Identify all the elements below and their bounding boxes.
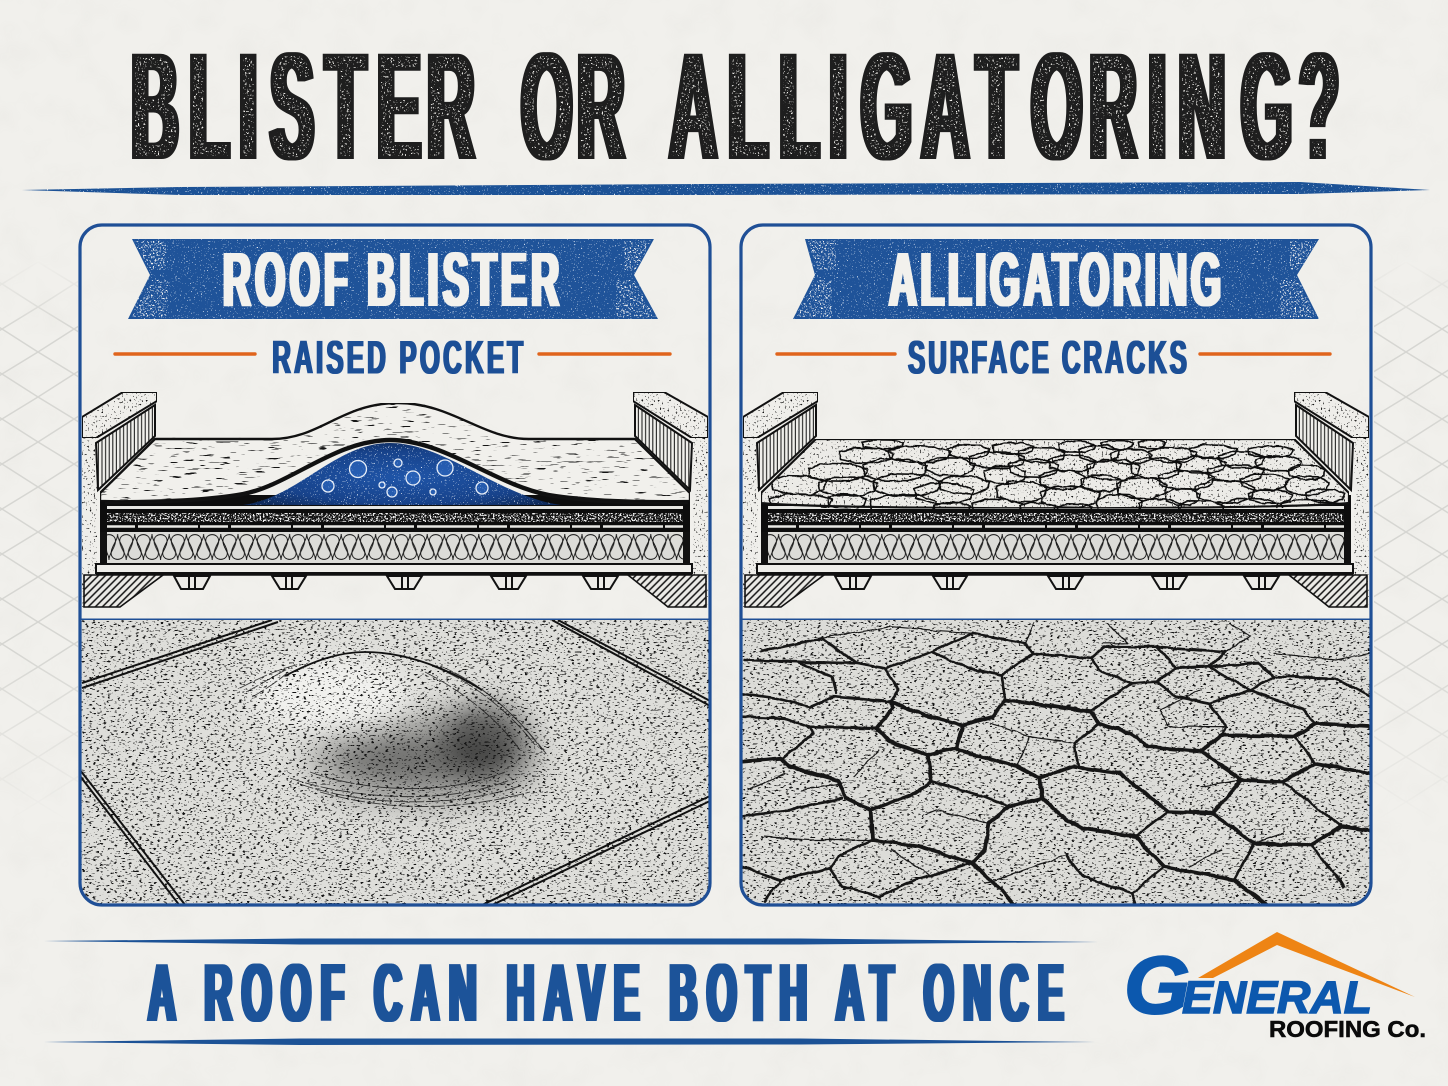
background lattice left and right: [0, 280, 1448, 770]
pocket fill: [243, 443, 561, 505]
contour hatching: [240, 664, 548, 806]
crack cells: [770, 440, 1345, 516]
building frame: [82, 392, 708, 607]
photo: cracked surface close-up: [740, 620, 1371, 906]
title: BLISTER: [131, 20, 475, 191]
panel border: [80, 225, 710, 905]
cross-section diagram: blister: [82, 392, 708, 607]
seams: [80, 620, 712, 906]
ribbon speckle right: [1280, 241, 1316, 317]
ribbon speckle left: [131, 241, 168, 317]
title: ALLIGATORING?: [670, 20, 1339, 191]
orange line right: [539, 352, 670, 356]
medium cracks: [740, 633, 1370, 905]
photo: blister close-up: [80, 620, 712, 906]
bottom tagline: A ROOF CAN HAVE BOTH AT ONCE: [148, 946, 1064, 1039]
surface grain: [741, 620, 1371, 906]
divider between diagram and photo: [741, 618, 1371, 622]
panel: alligatoring: [740, 225, 1371, 906]
title rule: [22, 182, 1430, 195]
orange line right: [1200, 352, 1330, 356]
major cracks: [742, 700, 1370, 905]
ribbon: [128, 239, 658, 319]
ribbon: [793, 239, 1319, 319]
membrane underside line: [105, 441, 688, 503]
bubbles: [322, 459, 488, 497]
banner text: ROOF BLISTER: [223, 236, 559, 322]
surface: [741, 620, 1371, 906]
subtitle text: RAISED POCKET: [272, 333, 523, 385]
ribbon speckle left: [796, 241, 836, 317]
hairline cracks: [748, 623, 1370, 883]
blister shadow: [317, 726, 533, 794]
surface: [80, 620, 710, 906]
cross-section diagram: alligatoring: [743, 392, 1369, 607]
logo: General Roofing Co.: [1124, 932, 1426, 1042]
banner: alligatoring: [793, 236, 1319, 322]
blister dark flank: [443, 702, 527, 774]
logo G: G: [1124, 940, 1190, 1031]
flat cracked roof surface: [761, 439, 1349, 508]
logo ROOFING Co.: ROOFING Co.: [1269, 1016, 1426, 1042]
crack network: [740, 623, 1370, 905]
blister pocket: [243, 443, 561, 505]
blister top edge: [285, 652, 482, 690]
ribbon speckle right: [616, 241, 655, 317]
blister highlight: [250, 659, 410, 731]
surface grain: [80, 620, 710, 906]
orange line left: [777, 352, 895, 356]
title: [131, 20, 1339, 191]
orange line left: [115, 352, 255, 356]
logo ENERAL: ENERAL: [1182, 972, 1372, 1023]
logo roof: [1198, 932, 1415, 997]
subtitle text: SURFACE CRACKS: [908, 333, 1187, 385]
banner: roof blister: [128, 236, 658, 322]
bottom rule top: [44, 938, 1098, 944]
title: OR: [521, 20, 625, 191]
panel: roof blister: [80, 225, 712, 906]
panel border: [741, 225, 1371, 905]
building frame: [743, 392, 1369, 607]
raised roof membrane: [100, 403, 690, 501]
banner text: ALLIGATORING: [889, 236, 1221, 322]
divider between diagram and photo: [80, 618, 710, 622]
bottom rule lower: [44, 1038, 1095, 1045]
